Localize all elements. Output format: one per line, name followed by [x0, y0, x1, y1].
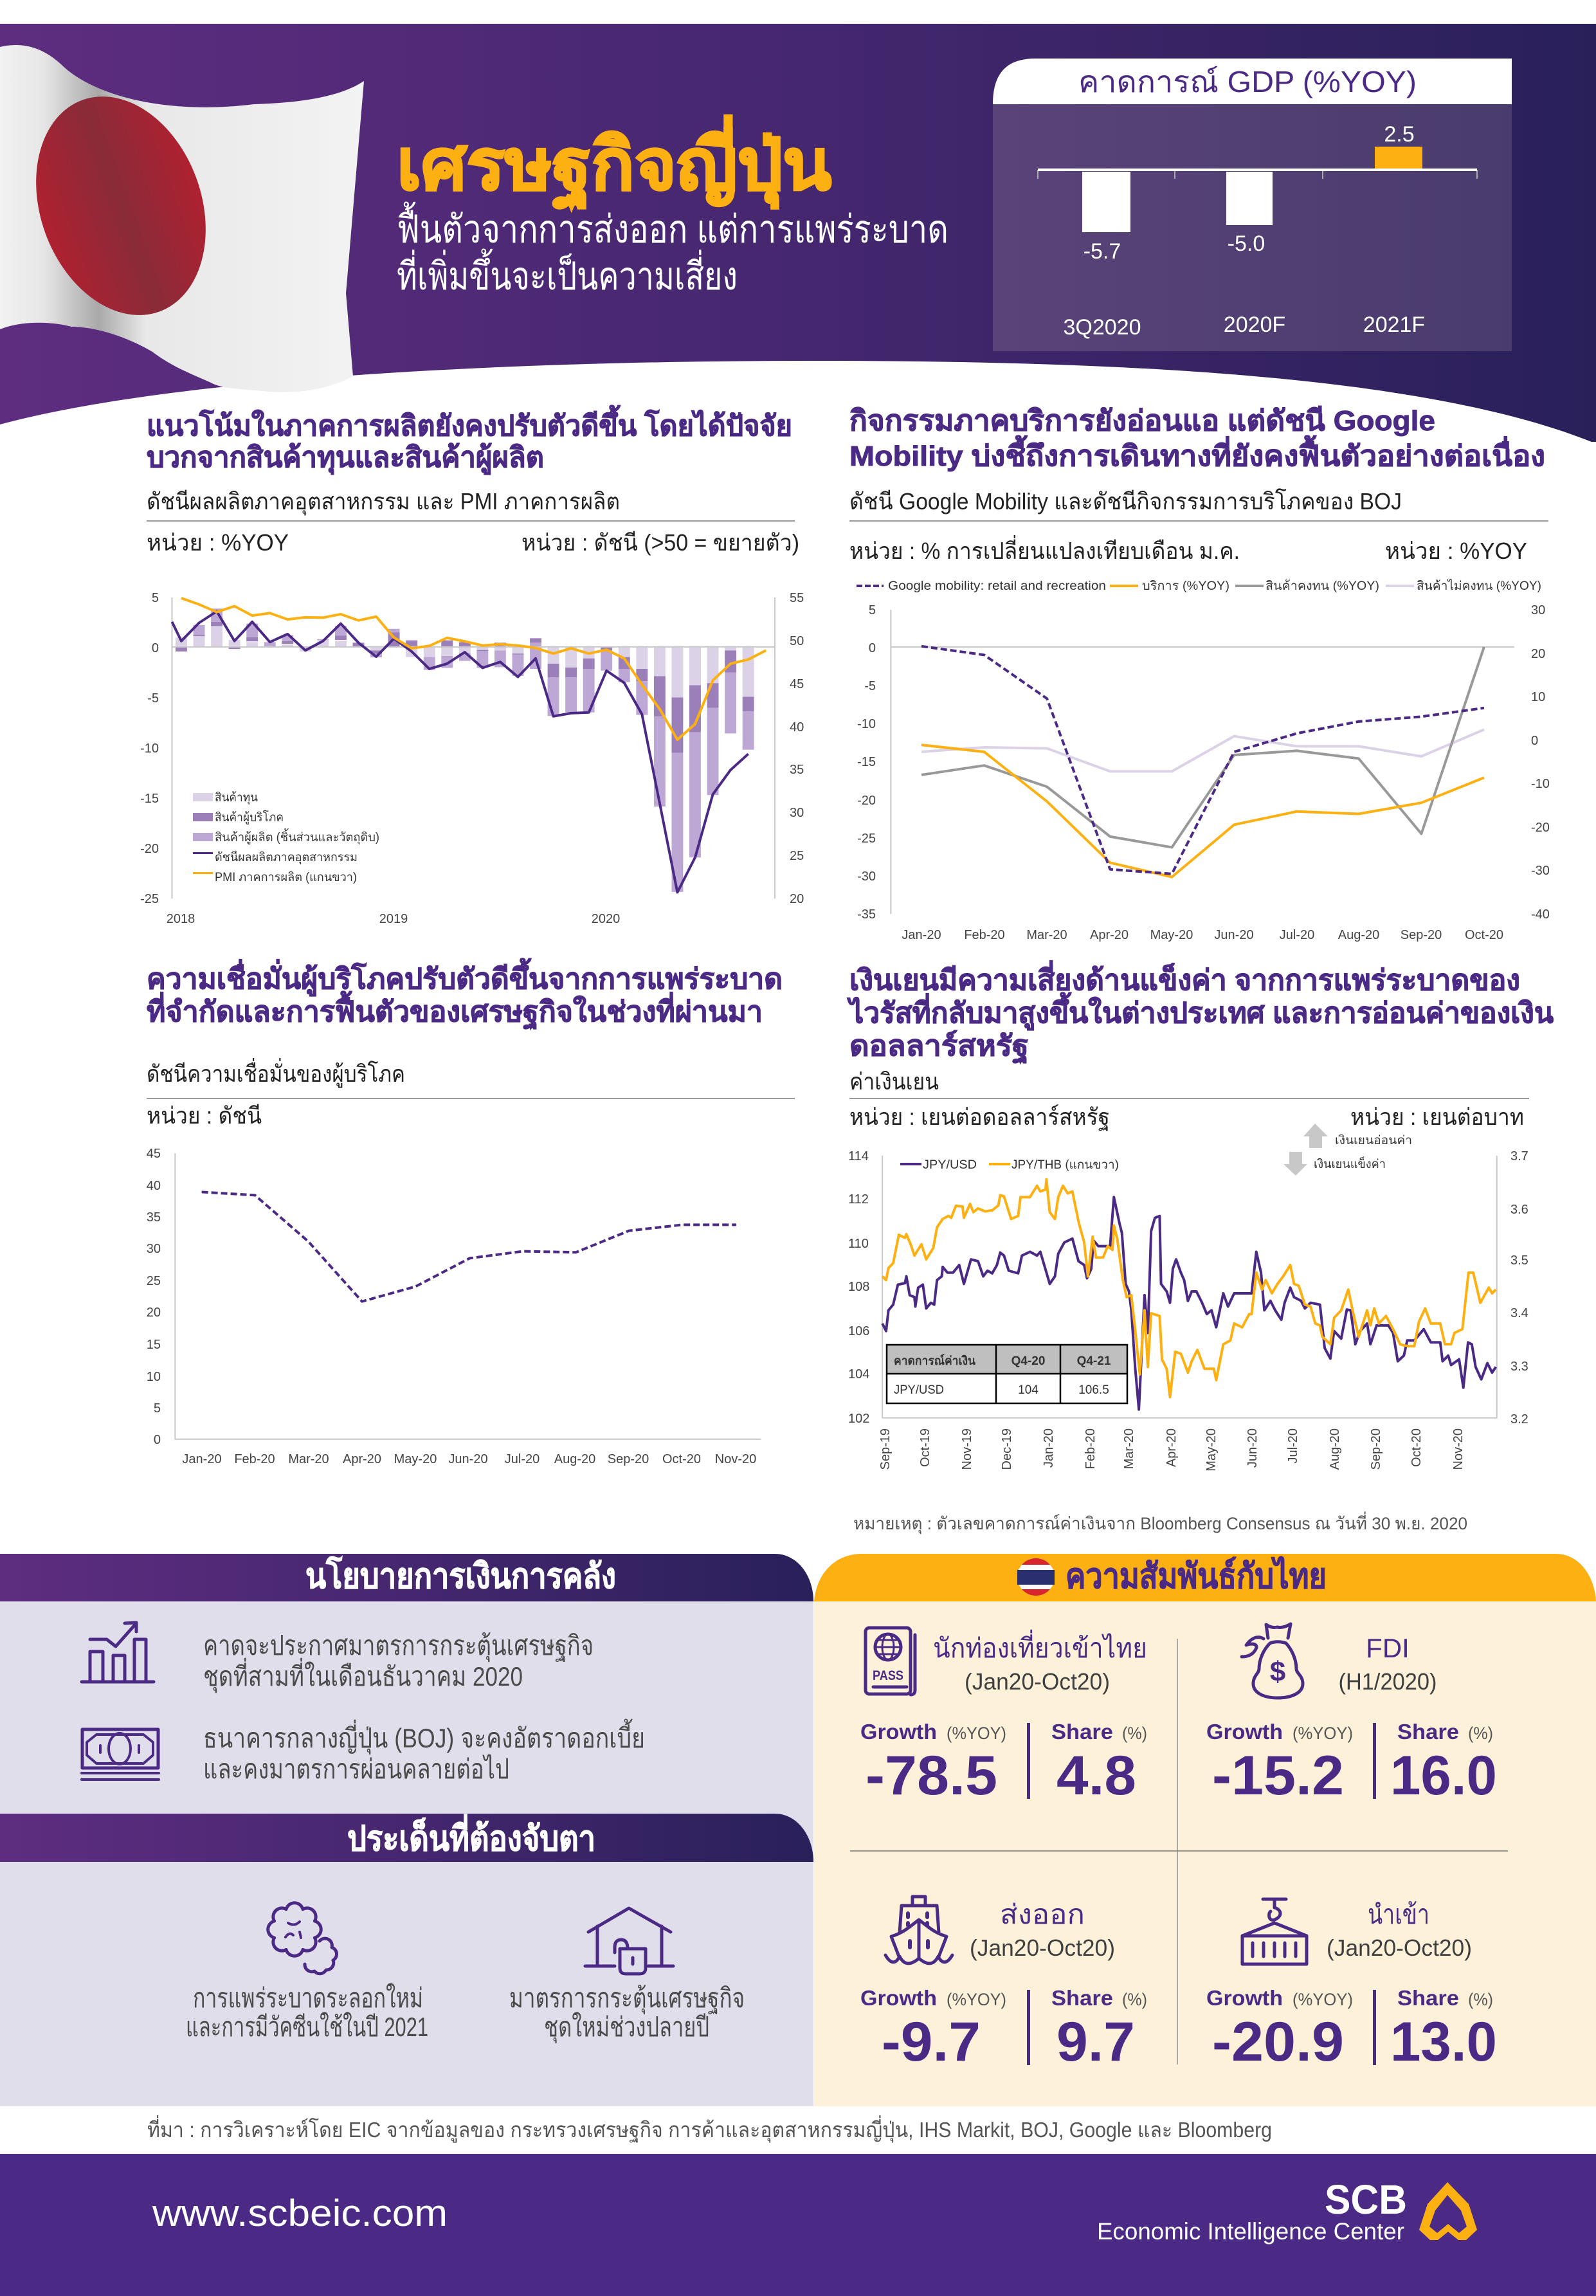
heading: watch points	[0, 1814, 813, 1862]
chart: yen exchange rate: Mar-20	[1122, 1428, 1136, 1469]
text: pandemic	[186, 1983, 428, 2042]
icon: money bag	[1242, 1624, 1303, 1698]
chart: industrial production and PMI: -10	[140, 742, 159, 756]
icon: growth chart	[82, 1623, 154, 1682]
chart: industrial production and PMI: 50	[790, 634, 804, 648]
text: stimulus package: ชุดใหม่ช่วงปลายปี	[544, 2012, 709, 2044]
chart: google mobility: -30	[1531, 864, 1550, 878]
chart: google mobility: -20	[1531, 821, 1550, 835]
stat: exports	[860, 1986, 1147, 2073]
chart: consumer confidence index: Sep-20	[608, 1452, 649, 1466]
icon: house with padlock	[585, 1908, 673, 1974]
chart: google mobility: -25	[857, 832, 876, 846]
stat: FDI	[1206, 1720, 1497, 1807]
panel: relations with Thailand	[814, 1554, 1596, 2106]
bar chart: GDP: -5.7	[1084, 239, 1121, 264]
chart title: ดัชนี Google Mobility และดัชนีกิจกรรมการบริโภคของ BOJ	[849, 488, 1402, 515]
exports: ส่งออก	[1000, 1899, 1085, 1929]
chart: google mobility: Sep-20	[1401, 928, 1442, 942]
legend: services chart: สินค้าคงทน (%YOY)	[1265, 579, 1379, 593]
logo: SCB	[1097, 2176, 1477, 2245]
chart: yen exchange rate: 110	[848, 1237, 869, 1251]
stat: tourists	[860, 1720, 1147, 1807]
chart: industrial production and PMI: 20	[790, 892, 804, 906]
bar chart: GDP: 2.5	[1384, 122, 1415, 147]
panel: manufacturing	[140, 405, 804, 926]
text: pandemic: และการมีวัคซีนใช้ในปี 2021	[186, 2012, 428, 2042]
stat: imports: Growth	[1206, 1986, 1283, 2010]
stat: FDI: Share	[1397, 1720, 1459, 1744]
heading: relations with Thailand	[814, 1554, 1596, 1601]
icon: passport: PASS	[873, 1668, 903, 1683]
chart: yen exchange rate: 104	[848, 1367, 869, 1381]
stat: exports: (%YOY)	[947, 1990, 1006, 2009]
legend: manufacturing chart: สินค้าทุน	[215, 791, 258, 805]
chart: google mobility: Mar-20	[1026, 928, 1067, 942]
bar chart: GDP: 3Q2020	[1064, 315, 1141, 340]
heading: manufacturing: บวกจากสินค้าทุนและสินค้าผู้ผลิต	[147, 442, 544, 475]
chart: google mobility	[857, 603, 1550, 942]
table: yen forecast: คาดการณ์ค่าเงิน	[894, 1354, 975, 1368]
website: www.scbeic.com	[152, 2192, 448, 2234]
units: หน่วย : ดัชนี	[147, 1102, 262, 1129]
FDI: FDI	[1366, 1633, 1410, 1663]
chart title: ค่าเงินเยน	[849, 1068, 939, 1095]
units	[849, 1104, 1524, 1131]
arrow: yen weakens: เงินเยนอ่อนค่า	[1335, 1134, 1412, 1147]
legend: manufacturing chart: ดัชนีผลผลิตภาคอุตสาหกรรม	[215, 850, 358, 865]
chart: industrial production and PMI: -20	[140, 842, 159, 856]
subtitle	[397, 201, 948, 298]
tourists	[860, 1628, 1147, 1807]
chart: industrial production and PMI: 55	[790, 591, 804, 605]
chart: yen exchange rate: 3.3	[1510, 1360, 1528, 1374]
chart: industrial production and PMI: 0	[152, 641, 159, 655]
chart: google mobility: Jan-20	[902, 928, 941, 942]
legend: yen chart: JPY/USD	[923, 1158, 977, 1172]
stat: FDI: -15.2	[1212, 1745, 1344, 1807]
legend: manufacturing chart: สินค้าผู้ผลิต (ชิ้นส่วนและวัตถุดิบ)	[215, 828, 379, 845]
chart: google mobility: Apr-20	[1090, 928, 1129, 942]
chart: consumer confidence index: Aug-20	[554, 1452, 595, 1466]
arrow: yen strengthens: เงินเยนแข็งค่า	[1314, 1156, 1386, 1171]
chart: consumer confidence index: Jul-20	[505, 1452, 540, 1466]
heading: consumer confidence: ความเชื่อมั่นผู้บริโภคปรับตัวดีขึ้นจากการแพร่ระบาด	[147, 958, 783, 996]
chart: industrial production and PMI: -15	[140, 792, 159, 806]
chart: yen exchange rate: 106	[848, 1324, 869, 1338]
tourists: นักท่องเที่ยวเข้าไทย	[933, 1630, 1147, 1663]
imports: นำเข้า	[1368, 1899, 1429, 1929]
chart: consumer confidence index: Feb-20	[234, 1452, 275, 1466]
chart: yen exchange rate: Jan-20	[1042, 1428, 1056, 1468]
chart title: ดัชนีผลผลิตภาคอุตสาหกรรม และ PMI ภาคการผลิต	[147, 488, 620, 516]
icon: ship	[885, 1897, 952, 1963]
chart: consumer confidence index: Oct-20	[662, 1452, 701, 1466]
chart: consumer confidence index: 35	[147, 1210, 161, 1225]
footer	[0, 2154, 1596, 2296]
chart: industrial production and PMI: -25	[140, 892, 159, 906]
arrow: yen weakens	[1303, 1124, 1412, 1148]
chart: industrial production and PMI	[140, 591, 804, 926]
text: BOJ	[203, 1718, 645, 1784]
chart: google mobility: -35	[857, 907, 876, 922]
subtitle: ที่เพิ่มขึ้นจะเป็นความเสี่ยง	[397, 248, 738, 298]
chart: consumer confidence index: Jan-20	[182, 1452, 222, 1466]
icon: japanese flag	[0, 45, 364, 392]
chart: yen exchange rate: Jun-20	[1246, 1428, 1260, 1468]
chart: yen exchange rate	[848, 1124, 1528, 1471]
stat: tourists: Share	[1051, 1720, 1113, 1744]
chart: consumer confidence index: 30	[147, 1242, 161, 1256]
chart: yen exchange rate: Nov-20	[1451, 1428, 1465, 1470]
stat: tourists: (%)	[1122, 1724, 1147, 1743]
legend: services chart	[857, 579, 1541, 593]
stat: tourists: Growth	[860, 1720, 937, 1744]
header banner	[0, 24, 1596, 463]
bar chart: GDP	[1038, 122, 1477, 340]
heading: fiscal and monetary policy	[0, 1554, 813, 1601]
stat: imports	[1206, 1986, 1497, 2073]
chart: yen exchange rate: Aug-20	[1328, 1428, 1342, 1470]
heading: consumer confidence: ที่จำกัดและการฟื้นตัวของเศรษฐกิจในช่วงที่ผ่านมา	[147, 990, 763, 1030]
stat: FDI: 16.0	[1390, 1745, 1497, 1807]
chart: yen exchange rate: Feb-20	[1084, 1428, 1098, 1469]
chart: google mobility: -30	[857, 870, 876, 884]
heading: services: กิจกรรมภาคบริการยังอ่อนแอ แต่ดัชนี Google	[849, 405, 1435, 437]
chart: google mobility: Aug-20	[1338, 928, 1379, 942]
chart: google mobility: Jun-20	[1214, 928, 1254, 942]
chart: google mobility: -10	[857, 717, 876, 731]
title: เศรษฐกิจญี่ปุ่น	[397, 115, 831, 211]
chart: yen exchange rate: Oct-20	[1410, 1428, 1424, 1467]
units: หน่วย : เยนต่อดอลลาร์สหรัฐ	[849, 1104, 1110, 1131]
chart: consumer confidence index: 45	[147, 1147, 161, 1161]
bar chart: GDP: 2020F	[1224, 313, 1285, 337]
stat: tourists: 4.8	[1056, 1745, 1136, 1807]
imports	[1206, 1899, 1497, 2073]
chart: consumer confidence index: 25	[147, 1274, 161, 1288]
stat: tourists: -78.5	[866, 1745, 997, 1807]
table: yen forecast: JPY/USD	[894, 1383, 944, 1397]
chart: google mobility: 30	[1531, 603, 1545, 617]
chart: google mobility: 10	[1531, 690, 1545, 704]
logo: SCB: Economic Intelligence Center	[1097, 2218, 1404, 2245]
chart: yen exchange rate: 102	[848, 1412, 869, 1426]
chart: industrial production and PMI: 2018	[167, 912, 195, 926]
table: yen forecast	[887, 1345, 1127, 1403]
chart: industrial production and PMI: 45	[790, 677, 804, 691]
chart: google mobility: 20	[1531, 647, 1545, 661]
chart: google mobility: 5	[869, 603, 876, 617]
text: BOJ: และคงมาตรการผ่อนคลายต่อไป	[203, 1754, 509, 1784]
heading: yen: ไวรัสที่กลับมาสูงขึ้นในต่างประเทศ และการอ่อนค่าของเงิน	[847, 992, 1554, 1030]
table: yen forecast: Q4-21	[1077, 1354, 1111, 1368]
stat: FDI: Growth	[1206, 1720, 1283, 1744]
chart: consumer confidence index	[147, 1147, 761, 1466]
units	[147, 529, 799, 556]
icon: banknote	[82, 1729, 159, 1780]
text: pandemic: การแพร่ระบาดระลอกใหม่	[193, 1983, 423, 2013]
logo: SCB: SCB	[1325, 2176, 1407, 2223]
legend: manufacturing chart: สินค้าผู้บริโภค	[215, 810, 284, 825]
chart: google mobility: -15	[857, 755, 876, 769]
stat: exports: 9.7	[1056, 2011, 1135, 2073]
chart: yen exchange rate: Nov-19	[960, 1428, 974, 1470]
stat: tourists: (%YOY)	[947, 1724, 1006, 1743]
panel: services	[849, 405, 1550, 942]
heading: yen	[847, 960, 1554, 1064]
heading: yen: เงินเยนมีความเสี่ยงด้านแข็งค่า จากการแพร่ระบาดของ	[849, 960, 1520, 996]
stat: exports: (%)	[1122, 1990, 1147, 2009]
chart: yen exchange rate: Sep-19	[878, 1428, 893, 1470]
chart: yen exchange rate: 112	[848, 1192, 869, 1207]
legend: manufacturing chart	[193, 791, 379, 884]
units: หน่วย : เยนต่อบาท	[1350, 1104, 1524, 1130]
chart: google mobility: -5	[864, 679, 876, 693]
text: stimulus: คาดจะประกาศมาตรการกระตุ้นเศรษฐกิจ	[203, 1630, 594, 1663]
legend: yen chart: JPY/THB (แกนขวา)	[1011, 1158, 1119, 1172]
note: หมายเหตุ : ตัวเลขคาดการณ์ค่าเงินจาก Bloomberg Consensus ณ วันที่ 30 พ.ย. 2020	[853, 1511, 1467, 1535]
chart: industrial production and PMI: 2020	[592, 912, 620, 926]
panel: consumer confidence	[147, 958, 795, 1466]
table: yen forecast: 104	[1018, 1383, 1038, 1397]
chart: yen exchange rate: 3.5	[1510, 1253, 1528, 1268]
chart: industrial production and PMI: 2019	[379, 912, 408, 926]
chart: yen exchange rate: 3.2	[1510, 1412, 1528, 1426]
text: BOJ: ธนาคารกลางญี่ปุ่น (BOJ) จะคงอัตราดอกเบี้ย	[203, 1718, 645, 1755]
FDI: (H1/2020)	[1339, 1668, 1437, 1695]
chart: consumer confidence index: Mar-20	[288, 1452, 329, 1466]
stat: imports: (%)	[1468, 1990, 1493, 2009]
imports: (Jan20-Oct20)	[1327, 1935, 1472, 1961]
panel: GDP forecast	[993, 59, 1512, 351]
heading: manufacturing: แนวโน้มในภาคการผลิตยังคงปรับตัวดีขึ้น โดยได้ปัจจัย	[147, 405, 792, 442]
legend: services chart: สินค้าไม่คงทน (%YOY)	[1417, 579, 1541, 593]
text: stimulus	[203, 1630, 594, 1693]
chart: consumer confidence index: 0	[154, 1433, 161, 1447]
chart: consumer confidence index: 5	[154, 1401, 161, 1416]
legend: manufacturing chart: PMI ภาคการผลิต (แกนขวา)	[215, 871, 357, 884]
heading: services	[849, 405, 1545, 472]
chart: yen exchange rate: 108	[848, 1280, 869, 1294]
stat: FDI: (%YOY)	[1292, 1724, 1353, 1743]
heading: fiscal and monetary policy: นโยบายการเงินการคลัง	[305, 1556, 616, 1596]
chart: consumer confidence index: 15	[147, 1338, 161, 1352]
stat: exports: Share	[1051, 1986, 1113, 2010]
bar chart: GDP: -5.0	[1228, 232, 1265, 256]
heading: relations with Thailand: ความสัมพันธ์กับไทย	[1066, 1556, 1327, 1596]
chart: industrial production and PMI: 30	[790, 806, 804, 820]
chart: google mobility: Jul-20	[1280, 928, 1314, 942]
chart: yen exchange rate: Oct-19	[918, 1428, 932, 1467]
stat: exports: -9.7	[882, 2011, 981, 2073]
units: หน่วย : ดัชนี (>50 = ขยายตัว)	[521, 529, 799, 556]
icon: container	[1242, 1899, 1307, 1964]
stat: imports: -20.9	[1212, 2011, 1344, 2073]
icon: passport	[866, 1628, 915, 1695]
legend: services chart: Google mobility: retail and recreation	[888, 579, 1106, 593]
chart: yen exchange rate: Sep-20	[1369, 1428, 1383, 1470]
text: stimulus: ชุดที่สามที่ในเดือนธันวาคม 2020	[203, 1658, 523, 1693]
table: yen forecast: Q4-20	[1011, 1354, 1045, 1368]
panel: policy	[0, 1554, 813, 2106]
chart title: ดัชนีความเชื่อมั่นของผู้บริโภค	[147, 1058, 405, 1088]
icon: Thai flag	[1017, 1558, 1055, 1596]
source text: ที่มา : การวิเคราะห์โดย EIC จากข้อมูลของ กระทรวงเศรษฐกิจ การค้าและอุตสาหกรรมญี่ปุ่น, IHS Markit, BOJ, Google และ Bloomberg	[147, 2115, 1272, 2143]
units: หน่วย : % การเปลี่ยนแปลงเทียบเดือน ม.ค.	[849, 535, 1240, 564]
chart: google mobility: Feb-20	[964, 928, 1005, 942]
chart: industrial production and PMI: 35	[790, 763, 804, 777]
chart: google mobility: May-20	[1150, 928, 1193, 942]
units	[849, 535, 1527, 564]
tourists: (Jan20-Oct20)	[965, 1668, 1110, 1695]
chart: yen exchange rate: 3.7	[1510, 1149, 1528, 1163]
chart: google mobility: 0	[1531, 734, 1538, 748]
stat: exports: Growth	[860, 1986, 937, 2010]
stat: FDI: (%)	[1468, 1724, 1493, 1743]
chart: industrial production and PMI: -5	[147, 691, 159, 706]
stat: imports: Share	[1397, 1986, 1459, 2010]
chart: google mobility: -40	[1531, 907, 1550, 922]
exports: (Jan20-Oct20)	[970, 1935, 1115, 1961]
chart: yen exchange rate: 3.6	[1510, 1203, 1528, 1217]
legend: yen chart	[900, 1158, 1119, 1172]
heading: GDP forecast: คาดการณ์ GDP (%YOY)	[1078, 65, 1417, 98]
units: หน่วย : %YOY	[1385, 538, 1527, 564]
heading: manufacturing	[147, 405, 792, 475]
chart: industrial production and PMI: 40	[790, 720, 804, 734]
chart: consumer confidence index: Jun-20	[448, 1452, 488, 1466]
text: stimulus package: มาตรการกระตุ้นเศรษฐกิจ	[509, 1983, 745, 2015]
legend: services chart: บริการ (%YOY)	[1142, 579, 1229, 593]
panel: yen	[847, 960, 1554, 1535]
chart: consumer confidence index: Nov-20	[715, 1452, 756, 1466]
stat: imports: (%YOY)	[1292, 1990, 1353, 2009]
units: หน่วย : %YOY	[147, 529, 289, 556]
heading: services: Mobility บ่งชี้ถึงการเดินทางที่ยังคงฟื้นตัวอย่างต่อเนื่อง	[849, 435, 1545, 472]
chart: google mobility: 0	[869, 641, 876, 655]
icon: money bag: $	[1270, 1656, 1285, 1688]
chart: yen exchange rate: Dec-19	[1000, 1428, 1014, 1470]
icon: virus	[268, 1903, 337, 1974]
chart: consumer confidence index: 40	[147, 1179, 161, 1193]
chart: yen exchange rate: 114	[848, 1149, 869, 1163]
chart: consumer confidence index: May-20	[394, 1452, 437, 1466]
text: stimulus package	[509, 1983, 745, 2044]
chart: google mobility: Oct-20	[1465, 928, 1503, 942]
stat: imports: 13.0	[1390, 2011, 1497, 2073]
FDI	[1206, 1624, 1497, 1807]
chart: consumer confidence index: 10	[147, 1370, 161, 1384]
chart: yen exchange rate: 3.4	[1510, 1306, 1528, 1320]
chart: google mobility: -10	[1531, 777, 1550, 791]
chart: consumer confidence index: 20	[147, 1306, 161, 1320]
chart: yen exchange rate: Jul-20	[1286, 1428, 1300, 1463]
bar chart: GDP: 2021F	[1363, 313, 1425, 337]
chart: google mobility: -20	[857, 794, 876, 808]
heading: consumer confidence	[147, 958, 783, 1030]
panel: watch points	[0, 1814, 813, 2044]
heading: watch points: ประเด็นที่ต้องจับตา	[347, 1814, 595, 1858]
heading: yen: ดอลลาร์สหรัฐ	[849, 1030, 1029, 1064]
chart: industrial production and PMI: 5	[152, 591, 159, 605]
chart: consumer confidence index: Apr-20	[343, 1452, 381, 1466]
chart: yen exchange rate: May-20	[1204, 1428, 1219, 1471]
table: yen forecast: 106.5	[1078, 1383, 1109, 1397]
subtitle: ฟื้นตัวจากการส่งออก แต่การแพร่ระบาด	[397, 201, 948, 251]
chart: yen exchange rate: Apr-20	[1165, 1428, 1179, 1467]
chart: industrial production and PMI: 25	[790, 849, 804, 863]
arrow: yen strengthens	[1283, 1152, 1386, 1176]
exports	[860, 1897, 1147, 2073]
